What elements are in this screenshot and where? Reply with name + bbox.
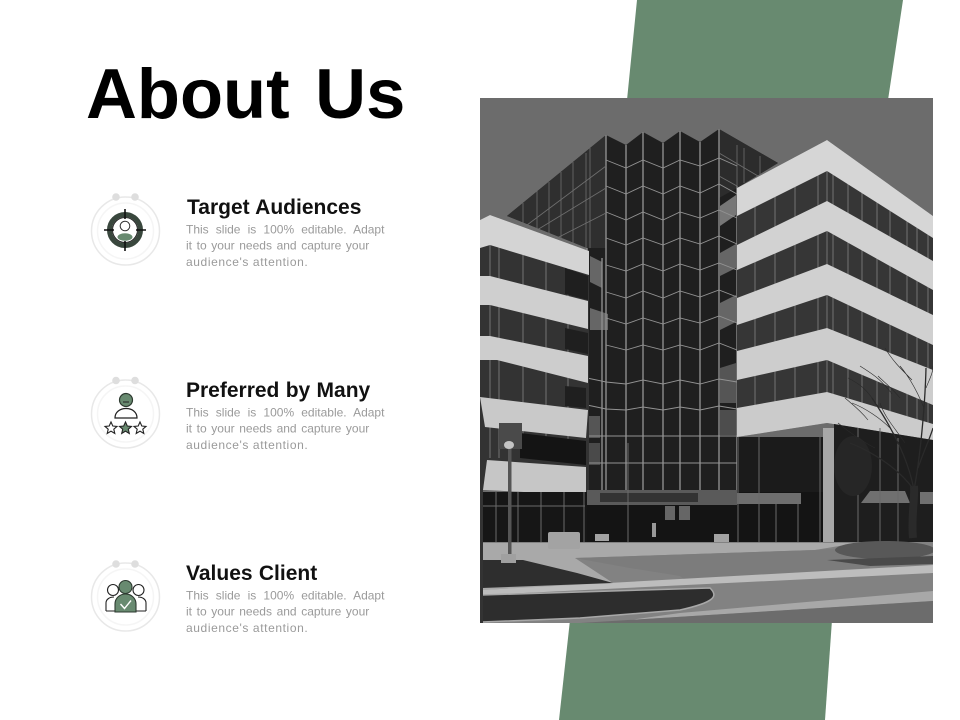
- icon: person with three stars: [92, 377, 160, 448]
- item: preferred by many: [92, 377, 385, 452]
- text block: [186, 406, 385, 452]
- pavement and lawns: [480, 541, 935, 623]
- text block: it to your needs and capture your: [186, 604, 369, 618]
- ground floor and entrance: [483, 424, 933, 543]
- text block: audience's attention.: [186, 255, 308, 269]
- text block: [186, 588, 385, 635]
- text block: audience's attention.: [186, 621, 308, 635]
- planters: [548, 532, 729, 543]
- title: About Us: [86, 54, 405, 133]
- glass tower: [507, 129, 778, 498]
- text block: This slide is 100% editable. Adapt: [186, 222, 385, 236]
- text block: This slide is 100% editable. Adapt: [186, 588, 385, 602]
- item: target audiences: [92, 193, 385, 269]
- left wing: [480, 215, 589, 492]
- heading: Preferred by Many: [186, 379, 371, 402]
- icon: target with person: [92, 193, 160, 265]
- street lamp: [480, 423, 522, 623]
- text block: [186, 222, 385, 269]
- green band: top: [627, 0, 903, 100]
- photo: office building: [480, 98, 935, 623]
- right wing: [737, 140, 933, 440]
- concrete column: [823, 428, 834, 547]
- text block: This slide is 100% editable. Adapt: [186, 406, 385, 420]
- text block: it to your needs and capture your: [186, 238, 369, 252]
- green band: bottom: [559, 620, 832, 720]
- evergreen shrub: [858, 437, 859, 496]
- text block: audience's attention.: [186, 438, 308, 452]
- heading: Target Audiences: [187, 196, 361, 219]
- bare tree: [838, 348, 933, 538]
- icon: client group with check: [92, 560, 160, 631]
- heading: Values Client: [186, 562, 317, 585]
- item: values client: [92, 560, 385, 635]
- text block: it to your needs and capture your: [186, 422, 369, 436]
